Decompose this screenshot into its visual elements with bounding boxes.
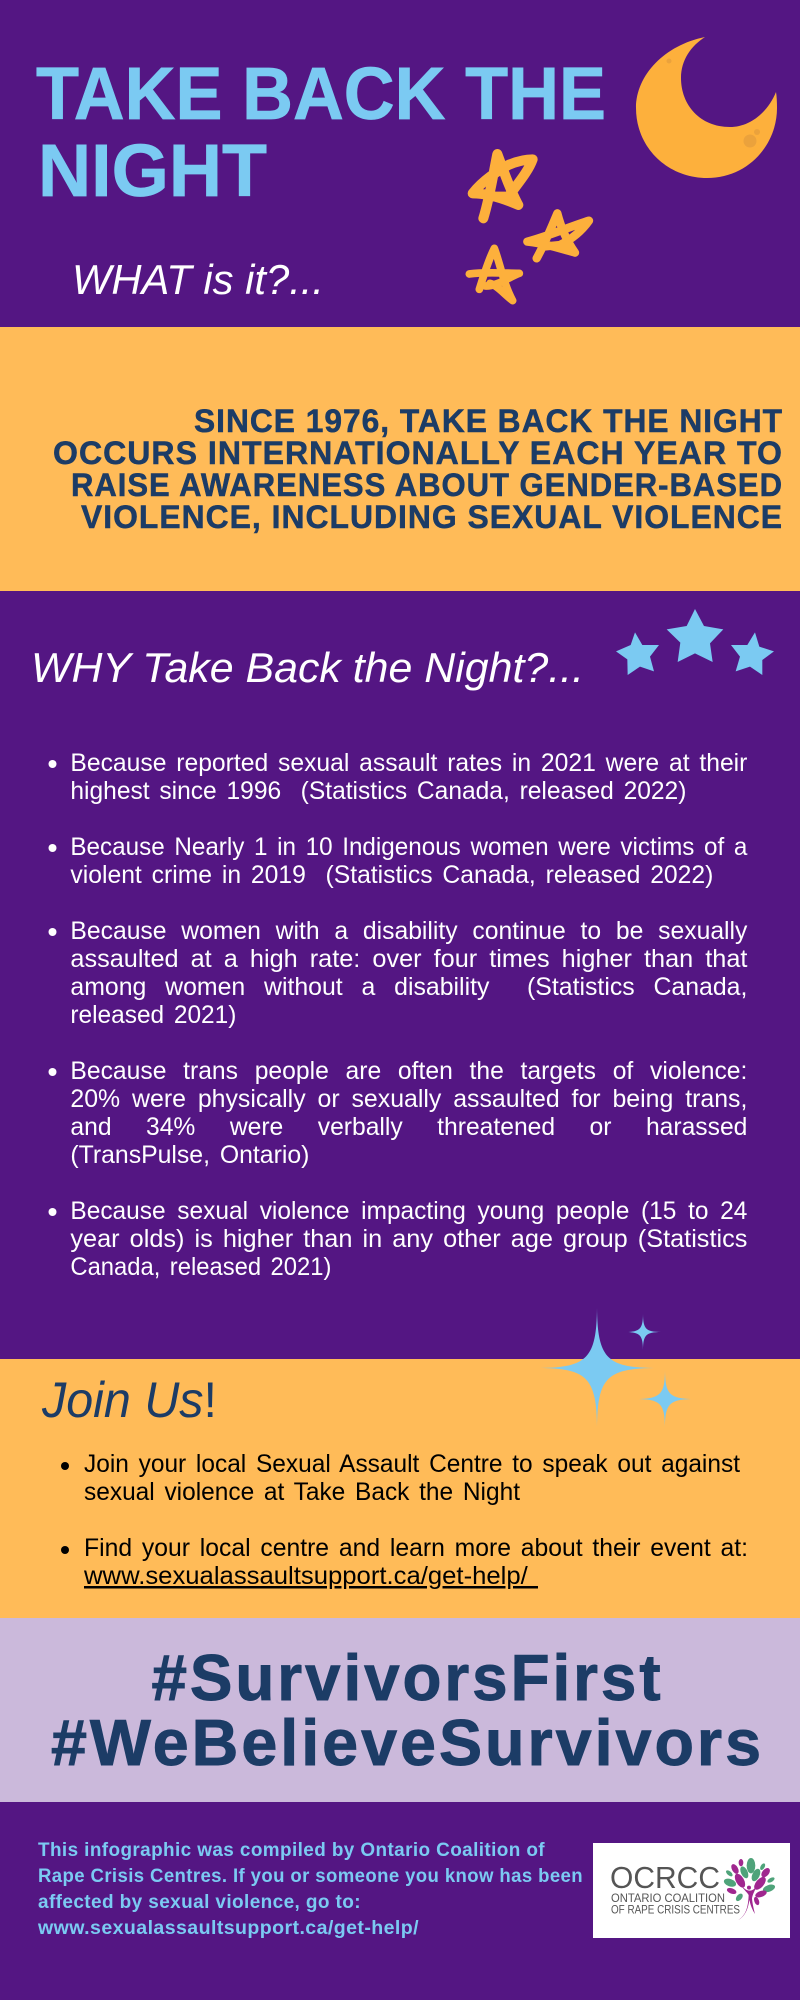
- heading: join us: Join Us!: [41, 1372, 217, 1428]
- heading: what is it: WHAT is it?...: [72, 256, 324, 303]
- bullet: join your local centre: Join your local Sexual Assault Centre to speak out against: [84, 1450, 740, 1478]
- bullet: women with a disability: Because women with a disability continue to be sexually: [70, 917, 748, 945]
- bullet: women with a disability: assaulted at a high rate: over four times higher than that: [70, 945, 747, 973]
- bullet: young people: Because sexual violence impacting young people (15 to 24: [70, 1197, 747, 1225]
- bullet: reported rates: Because reported sexual assault rates in 2021 were at their: [70, 749, 747, 777]
- bullet: young people: [48, 1197, 747, 1281]
- bullet: find your local centre: [61, 1534, 748, 1590]
- hashtag: survivors first: #SurvivorsFirst: [152, 1641, 664, 1714]
- bullet: women with a disability: released 2021): [70, 1001, 236, 1029]
- title: NIGHT: [38, 129, 267, 212]
- panel: join us: [0, 1308, 800, 1618]
- text block: credit: Rape Crisis Centres. If you or someone you know has been: [38, 1866, 583, 1887]
- bullet: trans people: 20% were physically or sexually assaulted for being trans,: [70, 1085, 747, 1113]
- bullet: join your local centre: [61, 1450, 740, 1506]
- logo: OCRCC: OF RAPE CRISIS CENTRES: [611, 1902, 740, 1916]
- bullet: reported rates: highest since 1996 (Statistics Canada, released 2022): [70, 777, 686, 805]
- bullet: trans people: [48, 1057, 747, 1169]
- bullet: women with a disability: among women without a disability (Statistics Canada,: [70, 973, 747, 1001]
- text block: description: [53, 403, 783, 535]
- bullet: indigenous women: [48, 833, 747, 889]
- logo: OCRCC: [593, 1843, 790, 1938]
- heading: why take back the night: WHY Take Back the Night?...: [31, 644, 584, 691]
- panel: footer: [0, 1802, 800, 2000]
- logo: OCRCC: ONTARIO COALITION: [611, 1891, 725, 1905]
- bullet: find your local centre: Find your local centre and learn more about their event at:: [84, 1534, 748, 1562]
- bullet: join your local centre: sexual violence at Take Back the Night: [84, 1478, 520, 1506]
- panel: what it is: [0, 327, 800, 591]
- bullet: women with a disability: [48, 917, 748, 1029]
- text block: credit: [37, 1840, 583, 1939]
- title: [36, 52, 606, 212]
- panel: header: [0, 0, 800, 327]
- bullet: indigenous women: violent crime in 2019 (Statistics Canada, released 2022): [70, 861, 713, 889]
- text block: description: VIOLENCE, INCLUDING SEXUAL VIOLENCE: [81, 499, 783, 535]
- icon: crescent moon: [636, 37, 777, 178]
- text block: description: OCCURS INTERNATIONALLY EACH YEAR TO: [53, 435, 783, 471]
- icon: sparkles: [540, 1308, 693, 1427]
- panel: why: [0, 591, 800, 1359]
- text block: description: RAISE AWARENESS ABOUT GENDER-BASED: [71, 467, 783, 503]
- text block: credit: This infographic was compiled by Ontario Coalition of: [38, 1840, 545, 1861]
- bullet: trans people: (TransPulse, Ontario): [70, 1141, 309, 1169]
- icon: scribbled stars: [469, 154, 589, 301]
- bullet: trans people: and 34% were verbally threatened or harassed: [70, 1113, 747, 1141]
- bullet: indigenous women: Because Nearly 1 in 10 Indigenous women were victims of a: [70, 833, 747, 861]
- logo: OCRCC: OCRCC: [610, 1860, 720, 1895]
- panel: hashtags: [0, 1618, 800, 1802]
- bullet: young people: Canada, released 2021): [70, 1253, 331, 1281]
- bullet: reported rates: [48, 749, 747, 805]
- text block: credit: affected by sexual violence, go to:: [38, 1892, 361, 1913]
- bullet: trans people: Because trans people are often the targets of violence:: [70, 1057, 747, 1085]
- hashtag: we believe survivors: #WeBelieveSurvivors: [51, 1706, 764, 1779]
- icon: three stars: [616, 609, 774, 675]
- bullet: young people: year olds) is higher than in any other age group (Statistics: [70, 1225, 747, 1253]
- title: TAKE BACK THE: [36, 52, 606, 135]
- bullet: find your local centre: www.sexualassaultsupport.ca/get-help/: [83, 1562, 538, 1590]
- text block: description: SINCE 1976, TAKE BACK THE NIGHT: [194, 403, 783, 439]
- text block: credit: www.sexualassaultsupport.ca/get-help/: [37, 1918, 419, 1939]
